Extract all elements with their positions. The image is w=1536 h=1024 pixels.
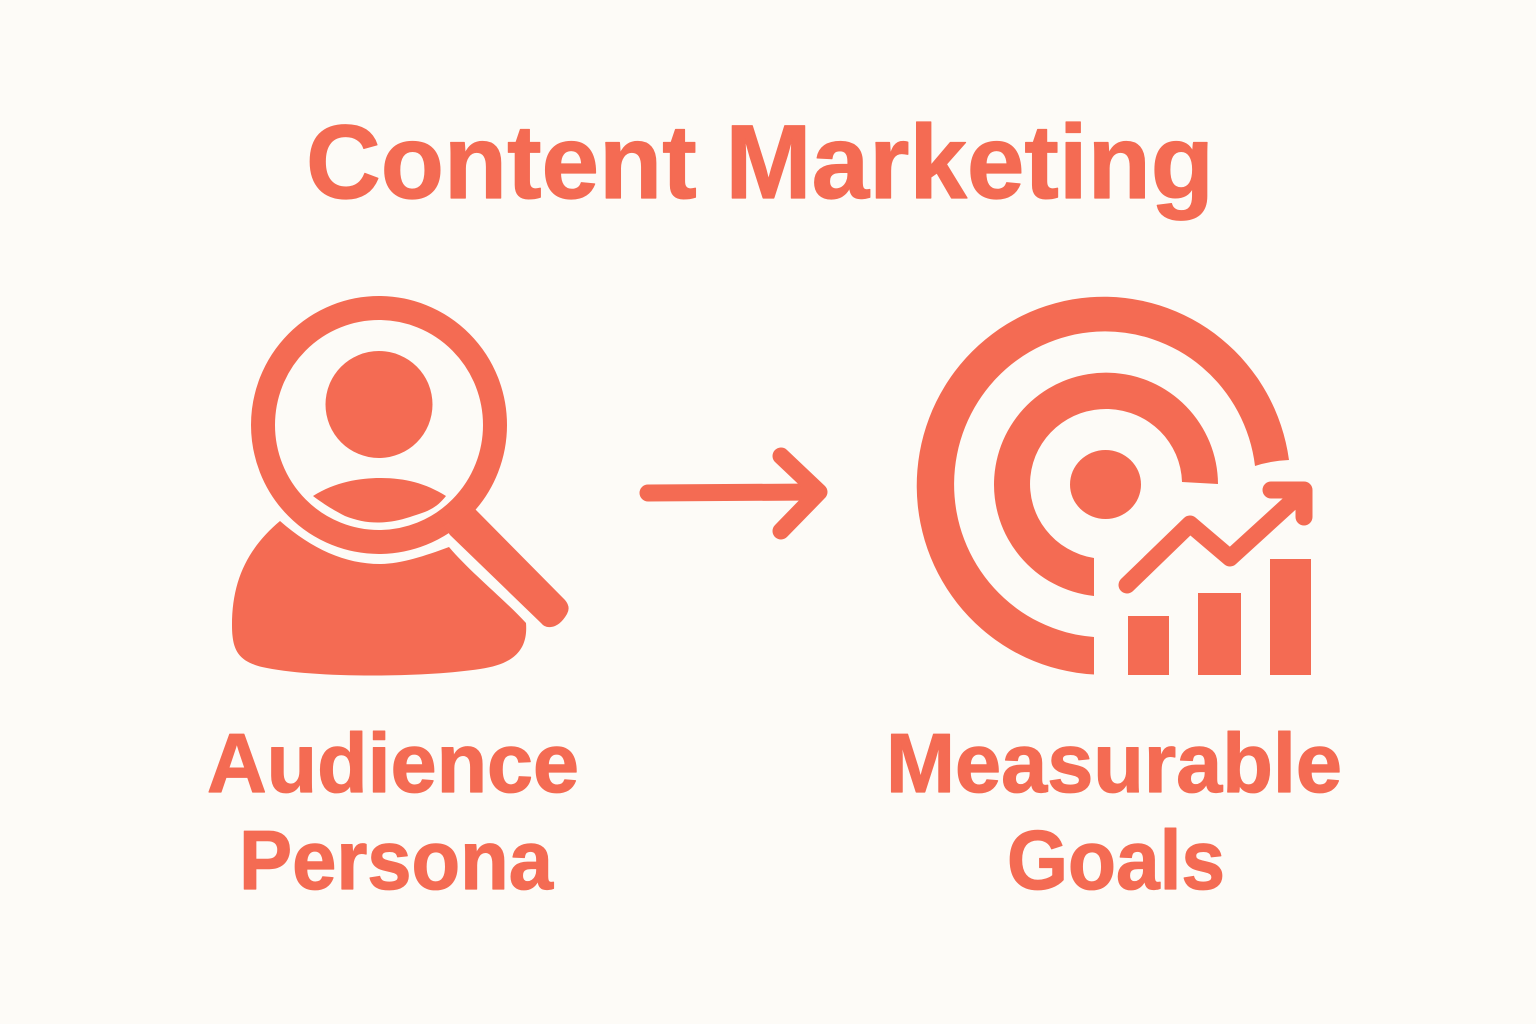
label: measurable goals: Measurable [886,716,1342,810]
trend line [1127,490,1304,585]
label: measurable goals: Goals [1007,813,1225,907]
outer ring [917,297,1289,674]
person head [326,351,432,458]
magnifier ring [263,308,495,542]
label: audience persona: Persona [239,813,554,907]
label: audience persona: Audience [207,716,579,810]
bars [1128,616,1169,675]
label: audience persona [207,716,579,907]
person body [232,521,526,676]
label: measurable goals [886,716,1342,907]
middle ring [994,373,1218,596]
title: Content Marketing [306,104,1214,221]
icon: audience persona magnifier [232,308,569,676]
center dot [1070,450,1141,519]
magnifier handle [440,498,569,627]
arrow [648,456,819,531]
person shoulders [313,478,446,523]
icon: target with growth chart [917,297,1311,675]
